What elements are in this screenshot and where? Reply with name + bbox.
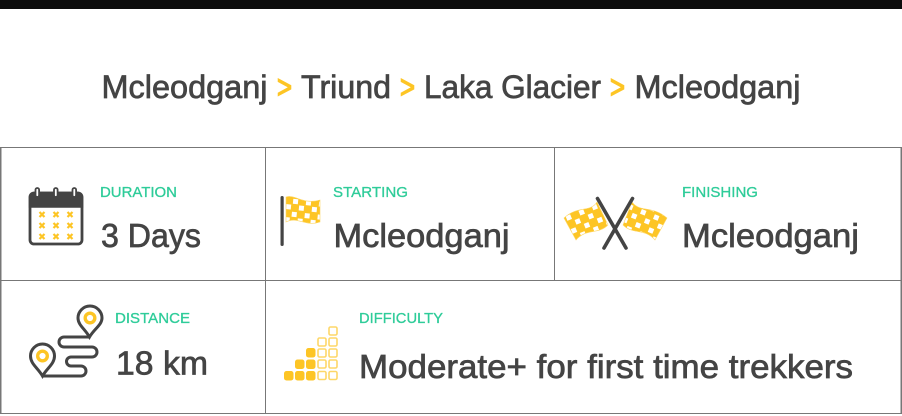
- title: Laka Glacier: [424, 69, 601, 105]
- value: start location: Mcleodganj: [334, 217, 510, 254]
- title: >: [610, 69, 625, 105]
- label: starting: STARTING: [333, 184, 408, 201]
- icon: difficulty steps: [284, 327, 337, 380]
- label: distance: DISTANCE: [115, 310, 190, 327]
- label: duration: DURATION: [100, 184, 177, 201]
- title: Mcleodganj: [102, 69, 268, 105]
- label: difficulty: DIFFICULTY: [359, 310, 443, 327]
- title: Triund: [301, 69, 391, 105]
- title: >: [277, 69, 292, 105]
- panel: distance: [30, 306, 208, 382]
- panel: difficulty: [284, 310, 853, 385]
- panel: finishing: [564, 184, 859, 254]
- value: 18 km: 18 km: [116, 344, 208, 382]
- value: finish location: Mcleodganj: [682, 217, 859, 254]
- panel: starting: [280, 184, 510, 254]
- icon: crossed checkered flags: [564, 198, 667, 248]
- title: Mcleodganj: [634, 69, 800, 105]
- title: >: [400, 69, 415, 105]
- icon: calendar: [30, 188, 82, 244]
- panel: duration: [30, 184, 201, 254]
- icon: checkered flag: [280, 196, 320, 246]
- label: finishing: FINISHING: [682, 184, 758, 201]
- value: difficulty level: Moderate+ for first time trekkers: [359, 348, 853, 385]
- title: [102, 69, 800, 105]
- top black bar: [0, 0, 902, 9]
- value: 3 days: 3 Days: [101, 217, 201, 254]
- icon: route with map pins: [30, 306, 102, 376]
